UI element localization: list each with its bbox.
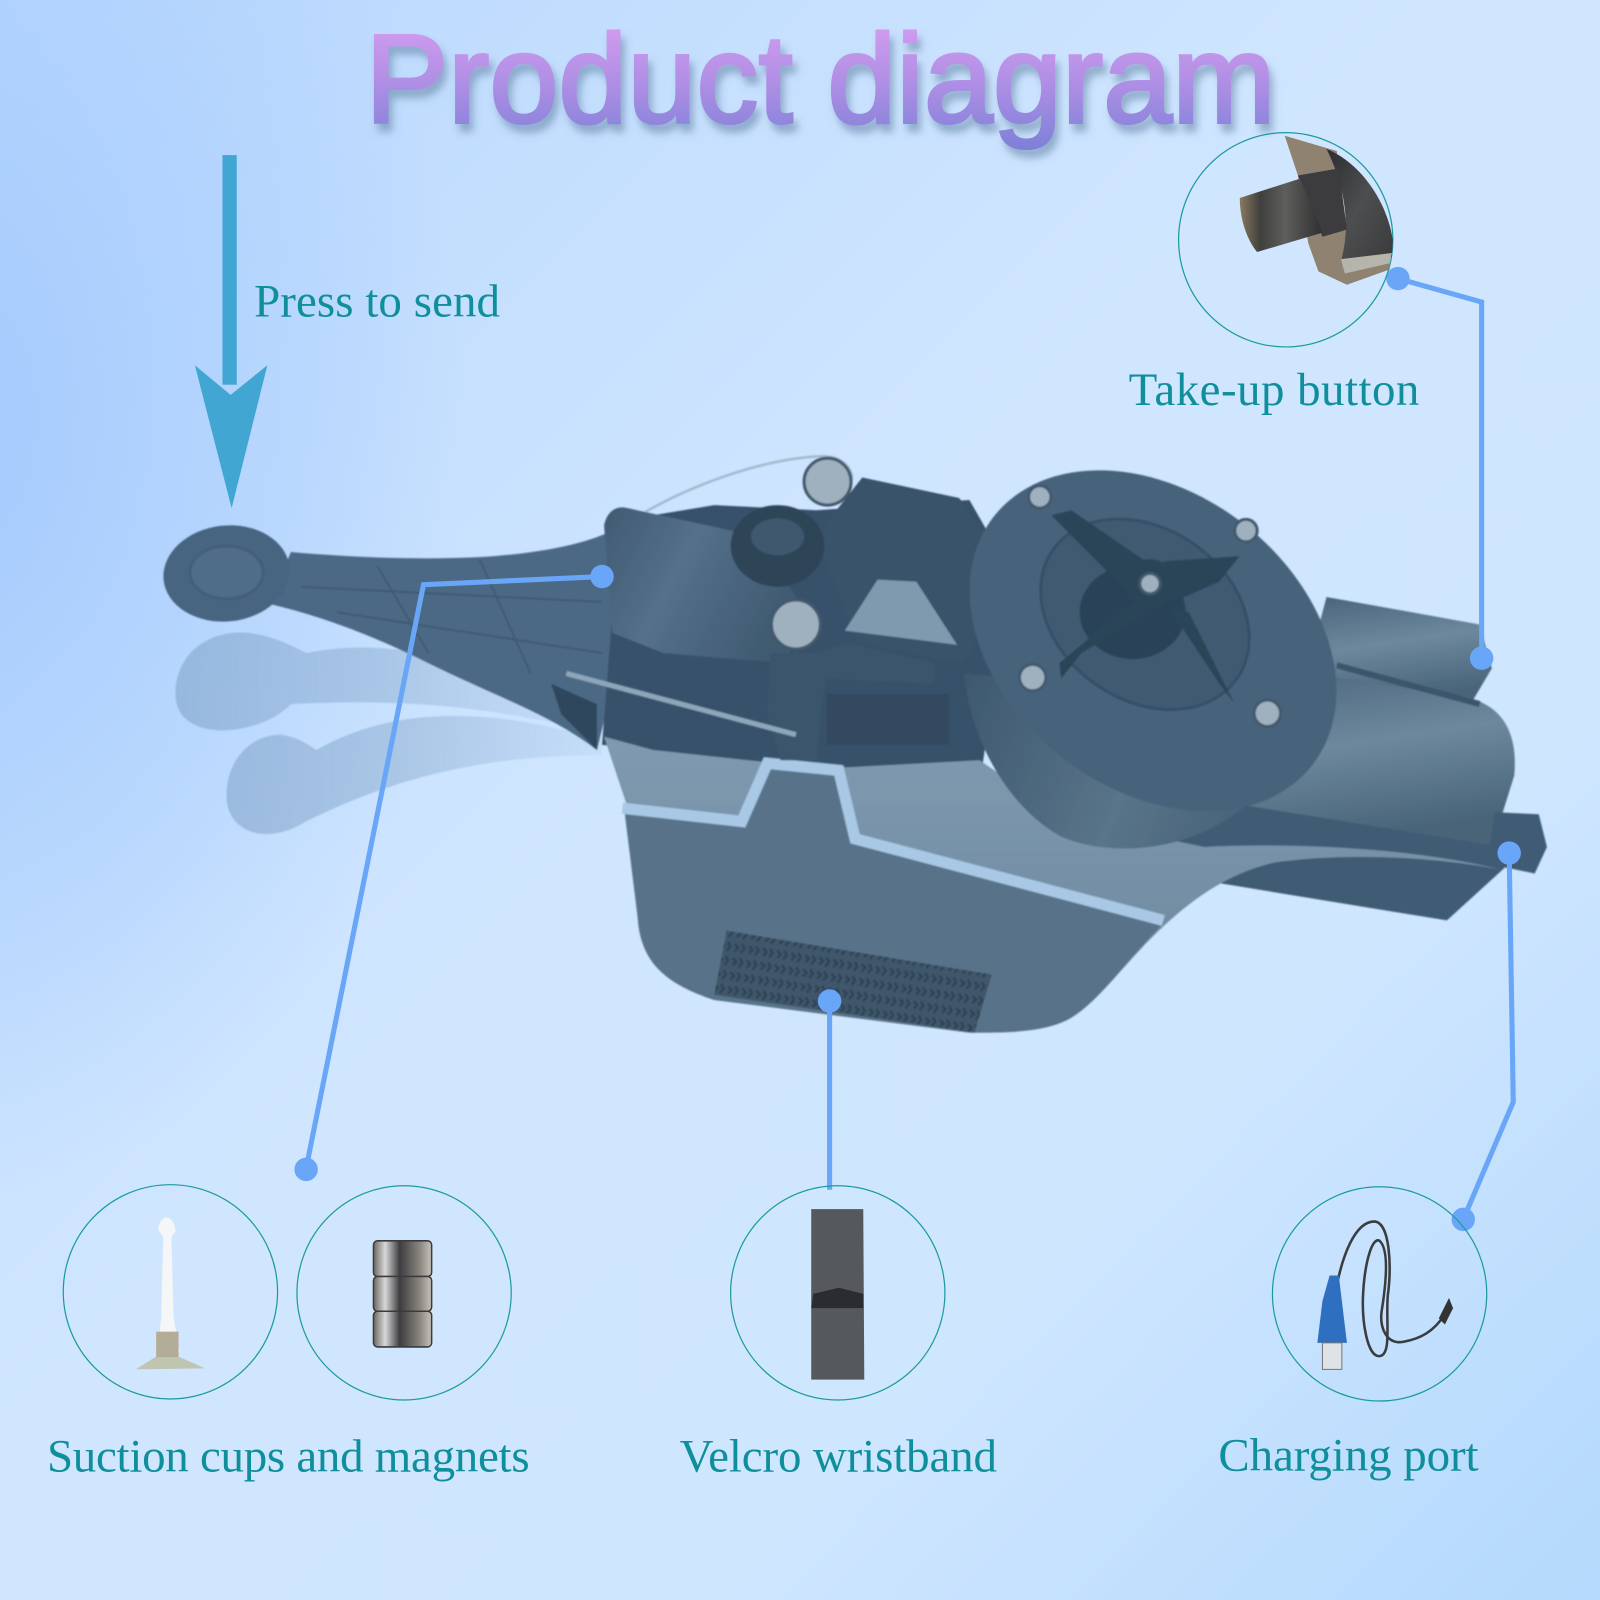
label: press to send: Press to send (254, 275, 500, 327)
button photo (1240, 136, 1393, 285)
callout line: take-up button (1386, 267, 1493, 670)
magnet stack (373, 1241, 432, 1347)
inset: velcro wristband (731, 1186, 945, 1400)
arrow: press direction (195, 155, 267, 508)
grip dark lower panel (624, 763, 1163, 1033)
inset: magnets (297, 1186, 511, 1400)
wristband photo (811, 1209, 864, 1380)
title: Product diagram (365, 7, 1276, 149)
callout line: suction cups and magnets (294, 565, 614, 1181)
callout line: velcro wristband (818, 989, 841, 1190)
grip light stripe (622, 763, 1163, 920)
inset: take-up button (1179, 133, 1393, 347)
rear tubes (1224, 597, 1515, 847)
latch cylinder (604, 507, 806, 663)
octagonal cover (816, 478, 1012, 663)
USB charging cable photo (1317, 1221, 1453, 1369)
lower housing body (602, 500, 1010, 786)
reel blades and hub (1051, 510, 1240, 704)
label: charging port: Charging port (1218, 1429, 1479, 1481)
lever arm (159, 519, 620, 750)
label: take-up button: Take-up button (1129, 364, 1419, 416)
inset: charging cable (1272, 1187, 1487, 1401)
screws (771, 458, 1281, 727)
suction cup photo (136, 1217, 205, 1369)
bottom rail (1122, 802, 1547, 920)
product photo: fishing line launcher (159, 400, 1547, 1033)
inset: suction cup (63, 1185, 278, 1399)
label: velcro wristband: Velcro wristband (680, 1430, 997, 1482)
black cap screw (731, 505, 824, 587)
callout line: charging port (1452, 841, 1521, 1231)
reel center hollow (1080, 565, 1186, 659)
light trapezoid window (845, 580, 957, 645)
reel inner ring (1004, 480, 1286, 749)
reel top disc (903, 400, 1403, 882)
label: suction cups and magnets: Suction cups and magnets (47, 1430, 530, 1482)
fishing wire (645, 456, 852, 512)
reel cylinder side (964, 673, 1327, 849)
linkage bracket and rod (566, 643, 949, 760)
lever reflection shadow (176, 633, 602, 834)
velcro strap patch (714, 931, 992, 1033)
grip body (604, 737, 1500, 1033)
